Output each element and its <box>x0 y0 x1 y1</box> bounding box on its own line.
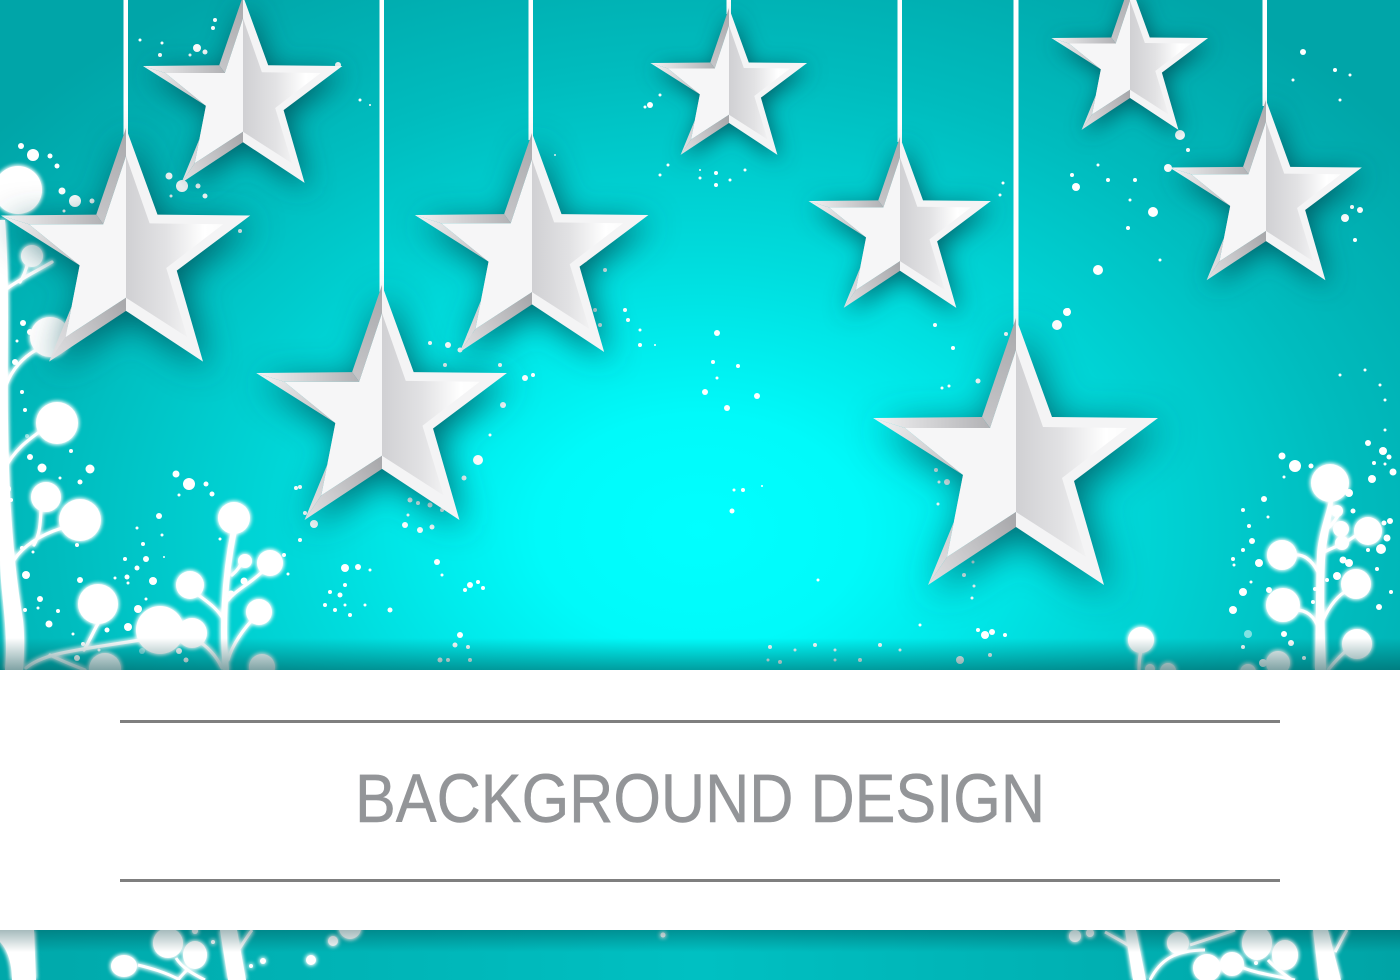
top rule <box>120 720 1280 723</box>
teal radial background <box>0 0 1400 670</box>
white plant on left <box>0 166 283 685</box>
star: largest lower right <box>873 318 1158 585</box>
shadow above white panel <box>0 638 1400 670</box>
bottom teal band <box>0 917 1400 980</box>
star: far left large <box>1 128 250 362</box>
star: top centre small <box>650 8 807 155</box>
star: top right small <box>1051 0 1208 130</box>
white plant on right <box>1128 464 1382 680</box>
star shadows <box>5 0 1365 594</box>
scattered white dots <box>3 18 1396 667</box>
star: far right medium <box>1169 100 1362 280</box>
title: BACKGROUND DESIGN <box>355 760 1045 837</box>
bottom rule <box>120 879 1280 882</box>
star: centre large <box>415 133 648 352</box>
star: centre right medium <box>808 137 991 308</box>
hanging strings <box>124 0 1267 325</box>
white title panel <box>0 670 1400 930</box>
star: top left small <box>143 0 342 183</box>
star: lower left large <box>256 285 507 520</box>
